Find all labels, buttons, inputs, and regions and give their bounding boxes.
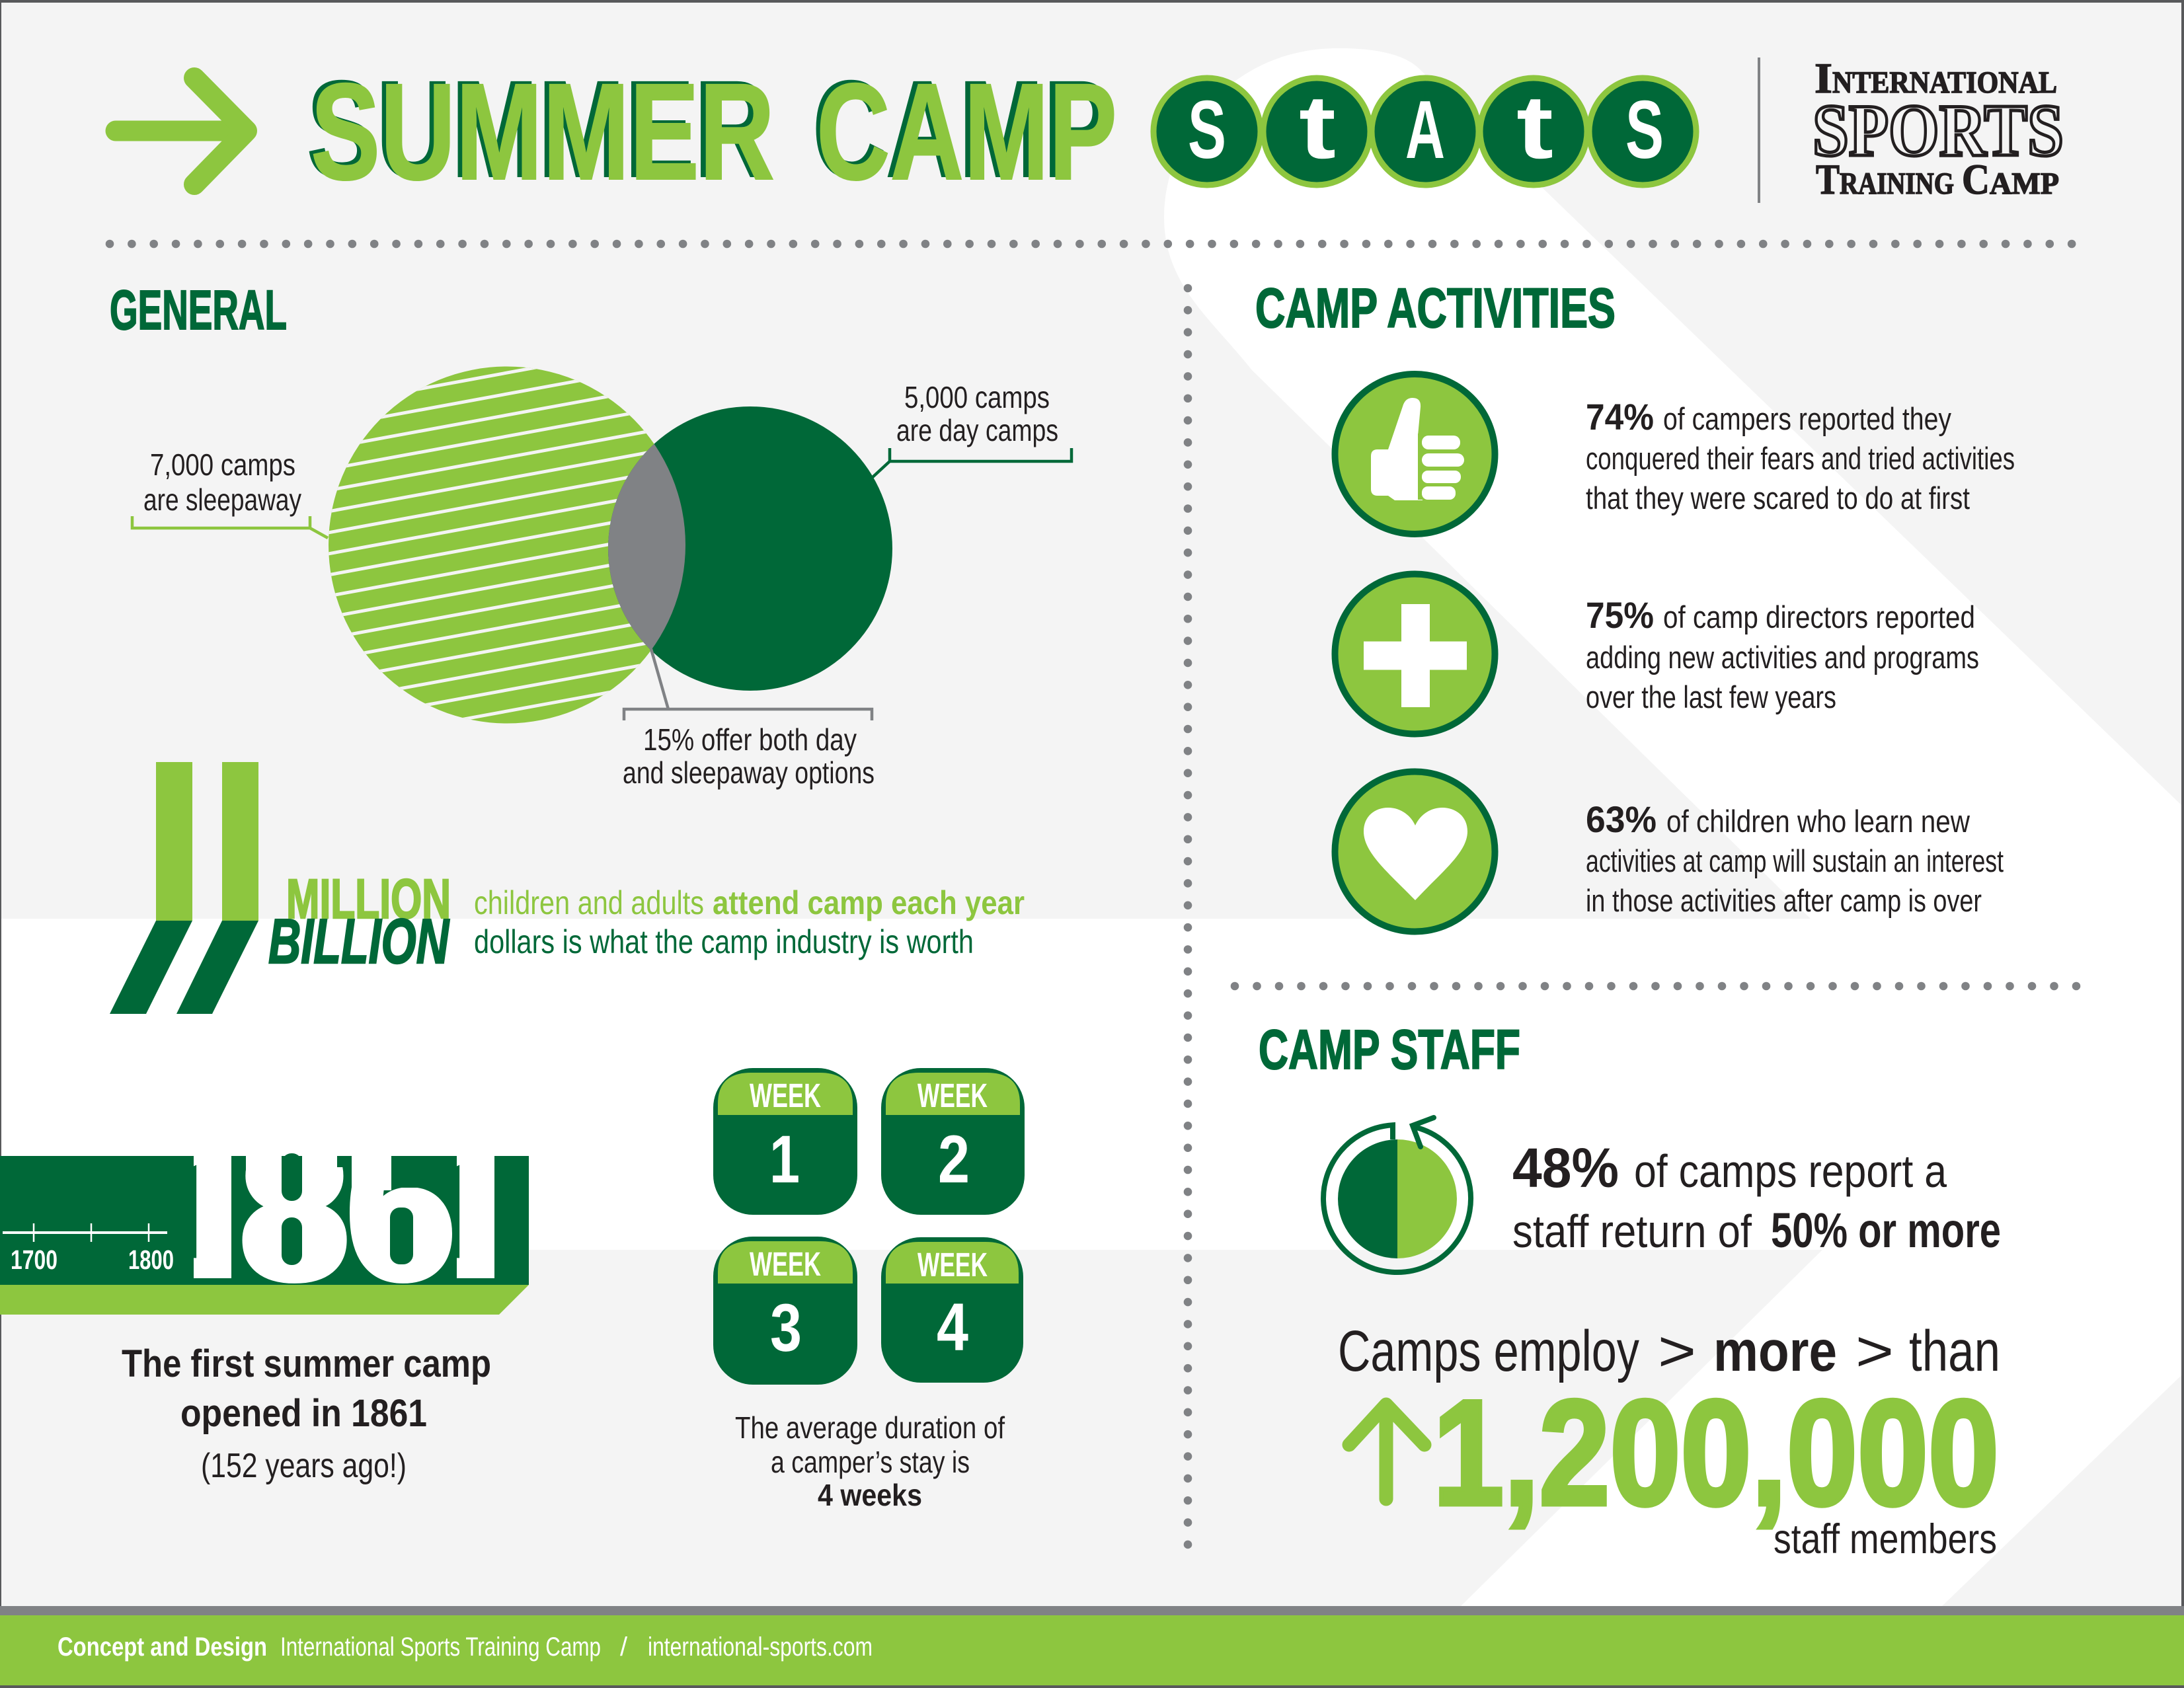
title: stats badges: A: [1405, 85, 1445, 176]
text: average duration: a camper’s stay is: [771, 1445, 970, 1479]
icon: week 1: WEEK: [750, 1077, 821, 1114]
logo: international sports training camp: [1813, 55, 2064, 204]
callout: both options: and sleepaway options: [623, 755, 875, 790]
stat: billion industry worth: [268, 906, 974, 977]
icon: thumbs up: [1335, 374, 1495, 534]
text: average duration: The average duration of: [735, 1410, 1005, 1445]
footer: Concept and Design: [58, 1632, 267, 1662]
text: first summer camp: [122, 1342, 491, 1485]
logo: international sports training camp: T: [1816, 156, 1840, 204]
text: 74 percent: conquered their fears and tried activities: [1586, 441, 2015, 476]
footer: international-sports.com: [648, 1632, 873, 1662]
icon: week 4: [881, 1237, 1023, 1383]
callout: sleepaway camps: [132, 447, 328, 538]
stat: billion industry worth: BILLION: [268, 906, 449, 977]
icon: week 3: 3: [770, 1290, 802, 1365]
logo: international sports training camp: I: [1814, 55, 1832, 102]
text: staff return: staff return of: [1512, 1206, 1752, 1257]
icon: week 4: WEEK: [917, 1246, 988, 1284]
text: camps employ more than: >: [1855, 1319, 1894, 1383]
heading: camp activities: CAMP ACTIVITIES: [1255, 277, 1616, 339]
callout: day camps: 5,000 camps: [904, 380, 1050, 414]
text: 63 percent: activities at camp will sustain an interest: [1586, 843, 2004, 878]
callout: day camps: are day camps: [896, 413, 1058, 447]
text: first summer camp: (152 years ago!): [201, 1447, 407, 1485]
heading: general: GENERAL: [110, 279, 287, 341]
icon: week 1: 1: [769, 1122, 800, 1197]
text: 74 percent: 74%: [1586, 396, 1654, 438]
divider: header logo rule: [1758, 58, 1760, 203]
logo: international sports training camp: SPORTS: [1813, 90, 2064, 172]
text: 75 percent: adding new activities and programs: [1586, 640, 1979, 675]
title: stats badges: t: [1516, 77, 1553, 177]
text: camps employ more than: >: [1658, 1319, 1696, 1383]
heading: camp staff: CAMP STAFF: [1259, 1018, 1520, 1081]
icon: week 1: [713, 1068, 857, 1215]
banner: 1861 timeline: 6: [346, 1098, 456, 1321]
icon: week 3: WEEK: [750, 1245, 821, 1283]
text: 74 percent: that they were scared to do at first: [1586, 480, 1970, 516]
icon: week 2: WEEK: [917, 1077, 988, 1114]
text: staff return: [1512, 1137, 2001, 1258]
text: 75 percent: [1586, 594, 1979, 714]
logo: international sports training camp: NTERNATIONAL: [1832, 65, 2057, 100]
icon: week 4: 4: [937, 1289, 968, 1365]
icon: heart: [1335, 772, 1495, 932]
title: stats badges: S: [1188, 85, 1226, 176]
text: staff return: of camps report a: [1634, 1145, 1947, 1197]
stat: million attendees: attend camp each year: [713, 884, 1025, 921]
banner: 1861 timeline: 1: [398, 1098, 545, 1321]
banner: 1861 timeline: [0, 1153, 529, 1315]
stat: million attendees: [286, 868, 1025, 930]
text: 63 percent: [1586, 798, 2004, 918]
text: average duration: 4 weeks: [818, 1478, 922, 1512]
icon: plus: [1335, 574, 1495, 734]
text: staff return: 48%: [1512, 1137, 1619, 1199]
callout: both options: 15% offer both day: [643, 722, 857, 757]
text: 74 percent: [1586, 396, 2015, 516]
icon: week 3: [713, 1237, 857, 1385]
text: 63 percent: of children who learn new: [1666, 804, 1970, 839]
banner: 1861 timeline: 1800: [128, 1245, 174, 1275]
icon: week 2: [881, 1068, 1025, 1215]
text: 74 percent: of campers reported they: [1663, 401, 1951, 436]
logo: international sports training camp: RAINING: [1840, 167, 1954, 201]
text: average duration: [735, 1410, 1005, 1512]
title: stats badges: t: [1299, 77, 1336, 177]
text: 75 percent: over the last few years: [1586, 679, 1836, 714]
banner: 1861 timeline: 1: [135, 1098, 282, 1321]
title: summer camp: SUMMER: [307, 53, 769, 206]
text: 63 percent: in those activities after camp is over: [1586, 883, 1982, 918]
graphic: eleven bars: [110, 762, 258, 1014]
footer: [0, 1606, 2184, 1688]
text: camps employ more than: more: [1713, 1319, 1837, 1383]
callout: sleepaway camps: are sleepaway: [143, 482, 301, 517]
text: 75 percent: of camp directors reported: [1663, 599, 1975, 634]
text: 63 percent: 63%: [1586, 798, 1657, 840]
icon: header arrow: [116, 78, 247, 184]
banner: 1861 timeline: 8: [239, 1098, 350, 1321]
title: summer camp: CAMP: [816, 56, 1117, 209]
text: staff members: staff members: [1774, 1516, 1997, 1562]
text: camps employ more than: Camps employ: [1338, 1319, 1639, 1383]
icon: staff return cycle: [1323, 1118, 1471, 1272]
text: 75 percent: 75%: [1586, 594, 1654, 636]
title: stats badges: [1153, 77, 1696, 185]
logo: international sports training camp: AMP: [1990, 167, 2059, 201]
title: summer camp: SUMMER: [311, 56, 775, 209]
icon: week 2: 2: [938, 1122, 970, 1197]
title: stats badges: S: [1625, 85, 1664, 176]
logo: international sports training camp: C: [1962, 156, 1990, 204]
callout: both options: [623, 649, 875, 790]
banner: 1861 timeline: 1700: [11, 1245, 58, 1275]
stat: million attendees: children and adults: [474, 884, 704, 921]
stat: billion industry worth: dollars is what the camp industry is worth: [474, 923, 974, 960]
text: camps employ more than: than: [1909, 1319, 2000, 1383]
text: first summer camp: opened in 1861: [180, 1392, 427, 1435]
text: camps employ more than: [1338, 1319, 2000, 1383]
title: summer camp: CAMP: [812, 53, 1111, 206]
icon: up arrow: [1349, 1404, 1424, 1499]
stat: 1,200,000 staff: 1,200,000: [1433, 1369, 1999, 1536]
footer: /: [620, 1632, 628, 1662]
stat: million attendees: MILLION: [286, 868, 451, 930]
text: staff return: 50% or more: [1771, 1203, 2001, 1258]
footer: International Sports Training Camp: [280, 1632, 601, 1662]
text: first summer camp: The first summer camp: [122, 1342, 491, 1385]
venn diagram: camp types: [329, 366, 892, 723]
callout: sleepaway camps: 7,000 camps: [150, 447, 295, 482]
callout: day camps: [873, 380, 1072, 477]
